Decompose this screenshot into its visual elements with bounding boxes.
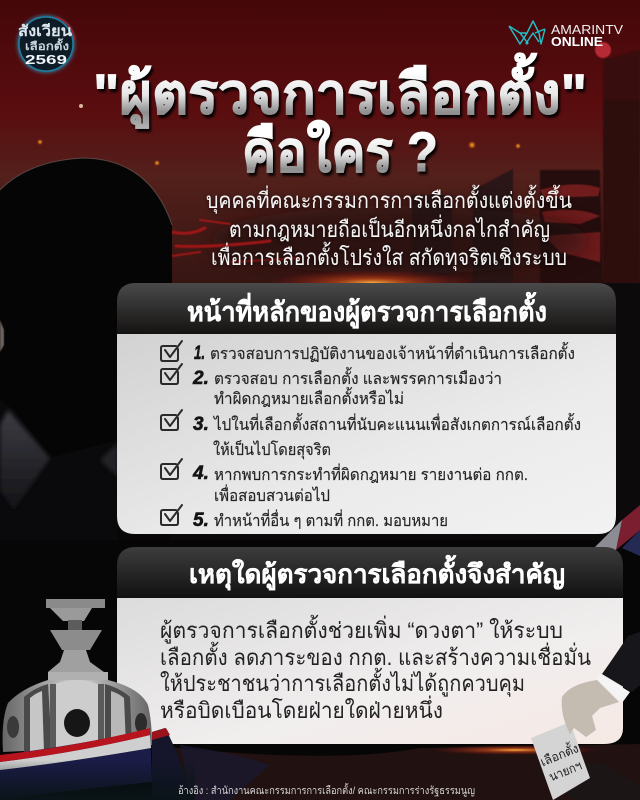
source note: อ้างอิง : สำนักงานคณะกรรมการการเลือกตั้ง/ คณะกรรมการร่างรัฐธรรมนูญ <box>178 783 475 797</box>
panel: why important <box>117 547 623 744</box>
shirt cuff <box>596 674 630 703</box>
duty list: ให้เป็นไปโดยสุจริต <box>213 439 331 460</box>
intro text <box>206 185 572 271</box>
logo: Amarin TV Online: ONLINE <box>551 35 603 49</box>
logo: สังเวียนเลือกตั้ง 2569 <box>18 17 75 71</box>
intro text: ตามกฎหมายถือเป็นอีกหนึ่งกลไกสำคัญ <box>229 214 550 242</box>
duty list: 5. <box>193 510 209 531</box>
ballot box <box>540 762 640 800</box>
duty list <box>192 342 581 531</box>
duty list: 3. <box>193 414 209 435</box>
logo: Amarin TV Online <box>509 21 624 49</box>
thai flag ribbon <box>0 728 195 800</box>
flag corner behind panel <box>595 505 640 556</box>
body text <box>160 615 591 723</box>
duty list: ไปในที่เลือกตั้งสถานที่นับคะแนนเพื่อสังเกตการณ์เลือกตั้ง <box>212 413 581 434</box>
duty list: ตรวจสอบการปฏิบัติงานของเจ้าหน้าที่ดำเนินการเลือกตั้ง <box>210 342 575 363</box>
title <box>93 53 587 183</box>
body text: หรือบิดเบือนโดยฝ่ายใดฝ่ายหนึ่ง <box>160 695 443 723</box>
duty list: 4. <box>192 463 209 484</box>
logo: สังเวียนเลือกตั้ง 2569: เลือกตั้ง <box>25 38 69 53</box>
duty list: ทำหน้าที่อื่น ๆ ตามที่ กกต. มอบหมาย <box>214 509 448 530</box>
duty list: หากพบการกระทำที่ผิดกฎหมาย รายงานต่อ กกต. <box>214 463 528 484</box>
logo: สังเวียนเลือกตั้ง 2569: 2569 <box>25 52 67 67</box>
logo: สังเวียนเลือกตั้ง 2569: สังเวียน <box>18 23 73 40</box>
logo: Amarin TV Online: AMARINTV <box>551 23 624 37</box>
title: คือใคร ? <box>242 119 438 183</box>
bottom band under panel <box>150 744 640 800</box>
checkbox icons <box>161 341 182 525</box>
duty list: 2. <box>192 368 209 389</box>
panel: main duties <box>117 283 616 534</box>
duty list: ตรวจสอบ การเลือกตั้ง และพรรคการเมืองว่า <box>214 367 502 388</box>
duty list: เพื่อสอบสวนต่อไป <box>214 484 330 505</box>
ballot paper: เลือกตั้ง <box>537 739 581 769</box>
panel header <box>117 283 616 334</box>
title: "ผู้ตรวจการเลือกตั้ง" <box>93 53 587 129</box>
duty list: ทำผิดกฎหมายเลือกตั้งหรือไม่ <box>214 387 404 408</box>
panel body <box>117 334 616 534</box>
silhouette of man <box>0 158 172 540</box>
body text: เลือกตั้ง ลดภาระของ กกต. และสร้างความเชื่อมั่น <box>160 642 591 670</box>
democracy monument <box>3 599 152 752</box>
body text: ให้ประชาชนว่าการเลือกตั้งไม่ได้ถูกควบคุม <box>160 668 525 697</box>
ballot paper: นายกฯ <box>547 758 584 784</box>
hand <box>562 680 619 737</box>
duty list: 1. <box>194 343 205 364</box>
body text: ผู้ตรวจการเลือกตั้งช่วยเพิ่ม “ดวงตา” ให้ระบบ <box>160 615 563 644</box>
intro text: เพื่อการเลือกตั้งโปร่งใส สกัดทุจริตเชิงระบบ <box>211 242 567 271</box>
panel heading: หน้าที่หลักของผู้ตรวจการเลือกตั้ง <box>187 291 547 329</box>
suit sleeve <box>602 632 640 692</box>
panel heading: เหตุใดผู้ตรวจการเลือกตั้งจึงสำคัญ <box>189 554 565 591</box>
panel header <box>117 547 623 598</box>
ballot paper <box>531 722 590 800</box>
hand dropping ballot <box>531 632 640 800</box>
panel body <box>117 598 623 744</box>
intro text: บุคคลที่คณะกรรมการการเลือกตั้งแต่งตั้งขึ้น <box>206 185 572 214</box>
